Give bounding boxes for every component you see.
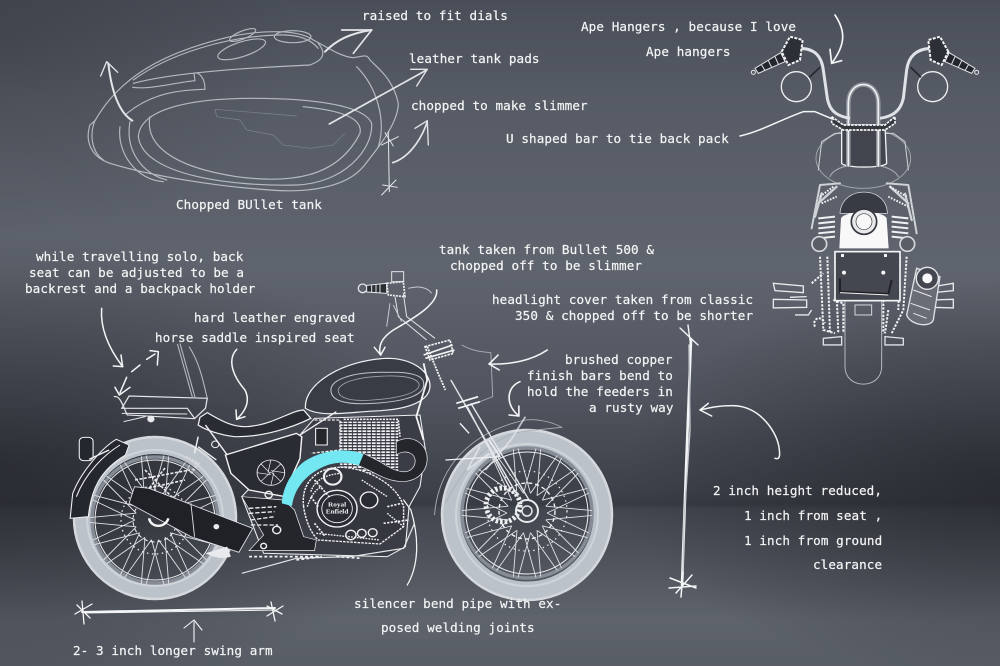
label: ape hangers (581, 19, 796, 59)
left grip and controls (751, 37, 803, 74)
curved arrow to dimension line (700, 403, 780, 459)
label: headlight cover: 350 & chopped off to be shorter (515, 308, 753, 323)
label: silencer bend pipe: silencer bend pipe with ex- (354, 596, 561, 611)
rear wheel (74, 437, 236, 599)
rear tyre outline (845, 302, 882, 384)
right bar (880, 48, 932, 118)
exhaust bend pipe dark (356, 439, 427, 482)
right grip and controls (928, 37, 979, 74)
top clamp (832, 117, 895, 130)
label: ape hangers: Ape hangers (646, 44, 731, 59)
silencer rear view (907, 267, 940, 325)
label: height reduced: 2 inch height reduced, (713, 483, 882, 498)
label: raised to fit dials: raised to fit dials (362, 8, 508, 23)
arrow: seat (232, 349, 247, 419)
label: horse saddle seat (155, 310, 355, 345)
label: height reduced: clearance (813, 557, 882, 572)
sketch: chopped Bullet tank (88, 26, 428, 195)
label: headlight cover: headlight cover taken from classic (492, 292, 753, 307)
arrow: silencer bend (404, 500, 417, 585)
dimension line (669, 325, 698, 597)
front fork (416, 345, 529, 500)
arrow: U shaped bar (740, 112, 833, 136)
engine case (303, 467, 409, 544)
u shaped bar (848, 85, 878, 167)
label: brushed copper finish bars (527, 352, 674, 415)
indicators (812, 237, 915, 251)
mirrors (781, 67, 948, 102)
long height dimension line with arrow (669, 325, 780, 597)
arrow: backrest (101, 308, 158, 395)
cyan copper bend pipe (282, 450, 364, 506)
tail light block (839, 209, 889, 248)
annotation arrows (101, 15, 843, 585)
label: tank from Bullet 500: chopped off to be slimmer (450, 258, 642, 273)
label: longer swing arm: 2- 3 inch longer swing arm (73, 643, 273, 658)
rear view motorcycle (773, 85, 953, 384)
foot rests (823, 337, 903, 345)
label: horse saddle seat: horse saddle inspired seat (155, 330, 355, 345)
label: horse saddle seat: hard leather engraved (194, 310, 355, 325)
label: back seat adjustable (25, 249, 256, 296)
label: height reduced: 1 inch from ground (744, 533, 882, 548)
arrow: tank (374, 290, 437, 355)
label: back seat adjustable: while travelling solo, back (36, 249, 244, 264)
ape hanger handlebars (751, 37, 979, 118)
foot pegs (773, 283, 953, 315)
label: U shaped bar: U shaped bar to tie back pack (506, 131, 729, 146)
licence plate (835, 252, 900, 301)
lower frame linework (812, 257, 907, 333)
front fender (435, 420, 562, 515)
headlight cover (462, 345, 493, 402)
label: leather tank pads: leather tank pads (409, 51, 540, 66)
side view handlebar (358, 272, 453, 360)
label: brushed copper finish bars: finish bars bend to (527, 368, 673, 383)
arrow: ape hangers (830, 15, 843, 63)
label: tank from Bullet 500 (439, 242, 654, 273)
label: headlight cover (492, 292, 753, 323)
silencer (129, 487, 267, 558)
engine fins (311, 419, 400, 473)
arrows on tank (101, 30, 428, 195)
label: height reduced (713, 483, 882, 572)
label: brushed copper finish bars: hold the feeders in (527, 384, 673, 399)
fuel tank (305, 358, 430, 414)
suspension left and right (818, 187, 908, 238)
swing arm dimension line (75, 601, 283, 642)
label: brushed copper finish bars: a rusty way (589, 400, 674, 415)
label: Chopped Bullet tank: Chopped BUllet tank (176, 197, 322, 212)
engine case: Enfield (326, 508, 348, 515)
left bar (800, 48, 850, 118)
label: silencer bend pipe: posed welding joints (381, 620, 535, 635)
label: back seat adjustable: backrest and a backpack holder (25, 281, 256, 296)
label: tank from Bullet 500: tank taken from Bullet 500 & (439, 242, 654, 257)
label: height reduced: 1 inch from seat , (744, 508, 882, 523)
frame and dark side panel (225, 415, 425, 573)
rear tank halo and panels (812, 128, 917, 233)
side view motorcycle (70, 343, 562, 573)
backrest (842, 125, 887, 167)
label: chopped to make slimmer: chopped to make slimmer (411, 98, 588, 113)
seat (114, 343, 336, 473)
label: silencer bend pipe (354, 596, 561, 635)
tank inner faint chop line (215, 109, 345, 148)
label: back seat adjustable: seat can be adjusted to be a (29, 265, 244, 280)
arrow: headlight cover (489, 350, 547, 370)
front wheel (442, 430, 612, 600)
label: brushed copper finish bars: brushed copper (565, 352, 673, 367)
label: ape hangers: Ape Hangers , because I love (581, 19, 796, 34)
rear fender and taillight (70, 437, 129, 518)
engine case: Royal (328, 501, 346, 509)
arrow: copper bars (509, 382, 520, 416)
seat rear (840, 192, 887, 213)
tank outline (88, 26, 398, 191)
